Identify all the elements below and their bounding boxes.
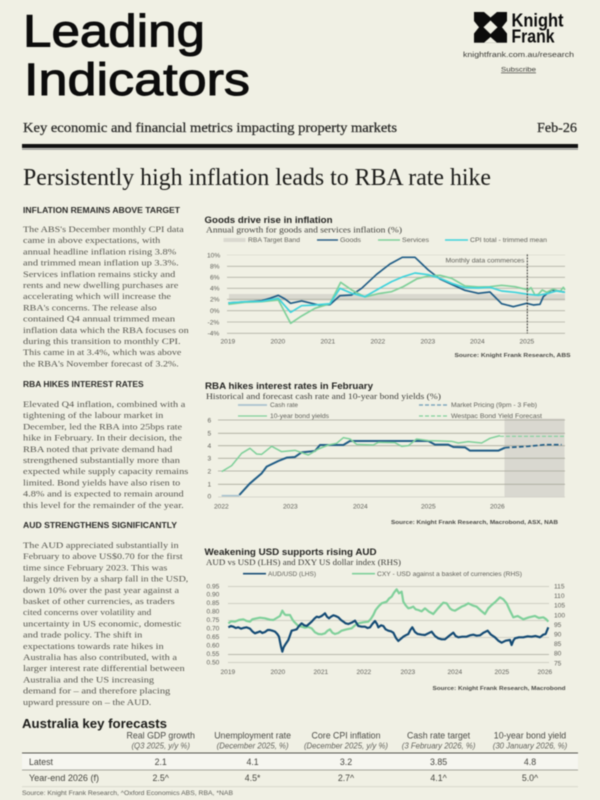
legend: Goods <box>340 237 362 244</box>
text block: AUD: basket of other currencies, as traders <box>23 596 175 606</box>
column headers: Core CPI inflation <box>312 730 381 740</box>
series: DXY <box>228 589 548 634</box>
title <box>23 6 250 105</box>
text block: RBA: hike in February. In their decision, the <box>23 433 182 443</box>
column headers: Cash rate target <box>407 730 471 740</box>
row: year-end 2026: 2.5^ <box>153 773 170 783</box>
annotation: Monthly data commences <box>446 257 525 264</box>
heading: AUD: AUD STRENGTHENS SIGNIFICANTLY <box>23 521 178 530</box>
axis labels: 85 <box>554 641 562 648</box>
text block: AUD: uncertainty in US economic, domestic <box>23 618 182 628</box>
series: cash rate start <box>222 493 239 498</box>
line chart <box>206 583 565 676</box>
text block: inflation: during this transition to monthly CPI. <box>23 336 181 346</box>
row: year-end 2026 <box>22 773 578 787</box>
text block: AUD: expectations towards rate hikes in <box>23 641 165 651</box>
axis labels: 0.80 <box>206 609 220 616</box>
axis labels: 10% <box>207 252 220 259</box>
axis labels <box>206 583 565 676</box>
axis labels: 0.65 <box>206 634 220 641</box>
axis labels: 2025 <box>520 338 535 346</box>
chart subtitle: Historical and forecast cash rate and 10-year bond yields (%) <box>206 391 441 401</box>
forecast shading <box>504 418 564 497</box>
text block: RBA: 4.8% and is expected to remain around <box>23 489 185 499</box>
axis labels: 1 <box>208 482 212 489</box>
axis labels: 80 <box>554 651 562 658</box>
legend <box>224 237 547 244</box>
column headers: (December 2025, %) <box>217 742 289 750</box>
text block: RBA: RBA noted that private demand had <box>23 444 173 454</box>
axis labels: 2021 <box>314 669 329 676</box>
axis labels: 5 <box>208 431 212 438</box>
panel: goods chart <box>204 215 571 359</box>
chart title: Weakening USD supports rising AUD <box>204 547 377 558</box>
monthly data marker <box>526 254 529 333</box>
panel: AUD chart <box>204 547 566 692</box>
axis labels: 0.90 <box>206 592 220 599</box>
axis labels: 6 <box>208 417 212 424</box>
legend: AUD/USD (LHS) <box>268 571 316 578</box>
axis labels: 2023 <box>420 338 436 346</box>
source: Source: Knight Frank Research, Macrobond, ASX, NAB <box>391 520 558 526</box>
row: latest <box>22 753 578 770</box>
text block: inflation: Services inflation remains sticky and <box>23 269 176 279</box>
text block: RBA: December, led the RBA into 25bps rate <box>23 421 182 431</box>
column headers: 10-year bond yield <box>494 730 566 740</box>
row: latest: Latest <box>29 757 54 767</box>
line chart <box>208 417 565 510</box>
series: trimmed mean <box>228 273 565 312</box>
axis labels <box>208 417 505 510</box>
axis labels: 2022 <box>214 504 229 510</box>
text block: AUD: larger interest rate differential between <box>23 663 186 673</box>
column headers: (December 2025, y/y %) <box>304 742 388 750</box>
text block: inflation: inflation data which the RBA focuses on <box>23 325 190 335</box>
legend: CXY - USD against a basket of currencies (RHS) <box>377 571 522 578</box>
axis labels: 4 <box>208 443 212 450</box>
axis labels: 3 <box>208 456 212 463</box>
text block: AUD: The AUD appreciated substantially in <box>23 540 180 550</box>
text block: RBA: expected while supply capacity remains <box>23 466 189 476</box>
legend: 10-year bond yields <box>270 413 330 420</box>
heading: RBA: RBA HIKES INTEREST RATES <box>23 380 144 389</box>
text block: inflation: came in above expectations, with <box>23 235 161 245</box>
series: bond forecast <box>500 435 565 438</box>
text block: inflation: accelerating which will increase the <box>23 291 171 301</box>
text block: AUD: cited concerns over volatility and <box>23 607 152 617</box>
text block: AUD: and trade policy. The shift in <box>23 630 143 640</box>
source: Source: Knight Frank Research, Macrobond <box>432 686 566 692</box>
text block: RBA: tightening of the labour market in <box>23 410 164 420</box>
row: latest: 3.85 <box>430 757 447 767</box>
chart title: Goods drive rise in inflation <box>204 215 333 226</box>
axis labels: 2026 <box>538 669 553 676</box>
axis labels: 2025 <box>421 504 436 510</box>
axis labels: 0 <box>208 493 212 500</box>
legend: Market Pricing (9pm - 3 Feb) <box>451 402 537 409</box>
axis labels: 105 <box>554 603 565 610</box>
axis labels: 4% <box>210 286 220 293</box>
axis labels: 115 <box>554 583 565 590</box>
panel: key forecasts table <box>22 716 578 797</box>
legend: CPI total - trimmed mean <box>470 237 547 244</box>
series: services <box>228 275 565 323</box>
text block: RBA: Elevated Q4 inflation, combined with a <box>23 399 186 409</box>
text block: inflation: and trimmed mean inflation up 3.3%. <box>23 258 179 268</box>
row: year-end 2026: Year-end 2026 (f) <box>29 773 99 783</box>
column headers: Real GDP growth <box>127 730 195 740</box>
text block: inflation: rents and new dwelling purchases are <box>23 280 179 290</box>
column headers: (30 January 2026, %) <box>493 742 568 750</box>
icon: Knight Frank logo <box>474 10 564 46</box>
series: goods <box>228 257 565 307</box>
axis labels: -4% <box>208 331 219 338</box>
axis labels: 8% <box>210 264 220 271</box>
axis labels: 90 <box>554 631 562 638</box>
axis labels: 100 <box>554 612 565 619</box>
axis labels: 2022 <box>356 669 372 676</box>
chart title: RBA hikes interest rates in February <box>205 381 374 392</box>
axis labels: 2022 <box>370 338 386 346</box>
text block: AUD: largely driven by a sharp fall in the USD, <box>23 574 188 584</box>
legend: RBA Target Band <box>248 237 300 244</box>
panel: RBA commentary <box>23 380 189 510</box>
text block: RBA: limited. Bond yields have also risen to <box>23 477 180 487</box>
row: year-end 2026: 4.1^ <box>430 773 448 783</box>
text block: AUD: demand for – and therefore placing <box>23 686 171 696</box>
axis labels: 2024 <box>448 669 463 676</box>
source: Source: Knight Frank Research, ABS <box>454 353 571 359</box>
chart subtitle: Annual growth for goods and services inflation (%) <box>206 224 402 234</box>
text block: AUD: down 10% over the past year against a <box>23 585 179 595</box>
row: year-end 2026: 2.7^ <box>338 773 355 783</box>
axis labels: 2024 <box>470 338 485 346</box>
axis labels: 2021 <box>320 338 336 346</box>
legend <box>243 571 522 578</box>
legend <box>238 402 542 420</box>
text block: inflation <box>23 224 190 368</box>
axis labels: 0.50 <box>206 660 220 667</box>
panel: RBA chart <box>205 381 565 526</box>
axis labels <box>207 252 535 346</box>
text block: AUD: Australia and the US increasing <box>23 674 155 684</box>
column headers: Unemployment rate <box>214 730 291 740</box>
text block: AUD: February to above US$0.70 for the first <box>23 551 183 561</box>
subscribe link: Subscribe <box>501 66 536 74</box>
text block: RBA <box>23 399 189 510</box>
main heading: Persistently high inflation leads to RBA rate hike <box>23 164 491 191</box>
axis labels: 2019 <box>220 669 236 676</box>
text block: inflation: annual headline inflation rising 3.8% <box>23 246 176 256</box>
axis labels: 2019 <box>220 338 236 346</box>
row: year-end 2026: 4.5* <box>245 773 261 783</box>
row: year-end 2026: 5.0^ <box>522 773 539 783</box>
website link: knightfrank.com.au/research <box>463 50 574 59</box>
axis labels: 2% <box>210 297 220 304</box>
legend: Westpac Bond Yield Forecast <box>451 413 542 420</box>
text block: AUD: Australia has also contributed, with a <box>23 652 177 662</box>
line chart <box>207 252 565 346</box>
chart subtitle: AUD vs USD (LHS) and DXY US dollar index (RHS) <box>206 557 401 567</box>
row: latest: 3.2 <box>340 757 352 767</box>
table source: Source: Knight Frank Research, ^Oxford Economics ABS, RBA, *NAB <box>22 790 234 797</box>
title: Leading <box>23 6 205 56</box>
series: bond yields <box>222 436 500 472</box>
text block: inflation: the RBA's November forecast of 3.2%. <box>23 358 179 368</box>
axis labels: 2025 <box>494 669 510 676</box>
axis labels: 2020 <box>270 338 286 346</box>
axis labels: 2 <box>208 468 212 475</box>
text block: RBA: strengthened substantially more than <box>23 455 181 465</box>
axis labels: 0% <box>210 308 220 315</box>
axis labels: 0.85 <box>206 600 220 607</box>
axis labels: 6% <box>210 275 220 282</box>
axis labels: -2% <box>208 319 219 326</box>
axis labels: 2026 <box>490 504 505 510</box>
legend: Cash rate <box>270 402 298 409</box>
row: latest: 4.8 <box>524 757 536 767</box>
axis labels: 2024 <box>353 504 368 510</box>
icon: Knight Frank logo: Knight <box>512 10 564 30</box>
axis labels: 0.60 <box>206 642 220 649</box>
axis labels: 110 <box>554 593 565 600</box>
series: AUD <box>228 613 548 652</box>
axis labels: 0.55 <box>206 651 220 658</box>
icon: Knight Frank logo: Frank <box>512 26 555 46</box>
text block: AUD <box>23 540 188 707</box>
axis labels: 2020 <box>270 669 286 676</box>
table title: Australia key forecasts <box>22 716 167 731</box>
text block: inflation: The ABS's December monthly CPI data <box>23 224 184 234</box>
title: Indicators <box>24 54 250 105</box>
axis labels: 0.95 <box>206 583 220 590</box>
column headers: (3 February 2026, %) <box>402 742 476 750</box>
text block: inflation: This came in at 3.4%, which was above <box>23 347 181 357</box>
panel: inflation commentary <box>23 206 190 368</box>
axis labels: 95 <box>554 622 562 629</box>
heading: inflation: INFLATION REMAINS ABOVE TARGET <box>23 206 180 215</box>
target band <box>229 294 565 301</box>
text block: AUD: time since February 2023. This was <box>23 562 168 572</box>
text block: inflation: contained Q4 annual trimmed mean <box>23 314 176 324</box>
row: latest: 2.1 <box>155 757 167 767</box>
text block: AUD: upward pressure on – the AUD. <box>23 697 151 707</box>
axis labels: 2023 <box>283 504 298 510</box>
panel: AUD commentary <box>23 521 188 707</box>
date: Feb-26 <box>537 120 577 135</box>
series: cash rate <box>239 441 505 495</box>
series: market pricing <box>505 445 562 448</box>
subtitle: Key economic and financial metrics impacting property markets <box>23 120 397 135</box>
axis labels: 2023 <box>400 669 416 676</box>
column headers: (Q3 2025, y/y %) <box>131 742 190 750</box>
row: latest: 4.1 <box>246 757 259 767</box>
axis labels: 0.75 <box>206 617 220 624</box>
text block: RBA: this level for the remainder of the year. <box>23 500 184 510</box>
text block: inflation: RBA's concerns. The release also <box>23 302 157 312</box>
legend: Services <box>402 237 430 244</box>
column headers <box>127 730 568 750</box>
axis labels: 0.70 <box>206 626 220 633</box>
axis labels: 75 <box>554 660 562 667</box>
